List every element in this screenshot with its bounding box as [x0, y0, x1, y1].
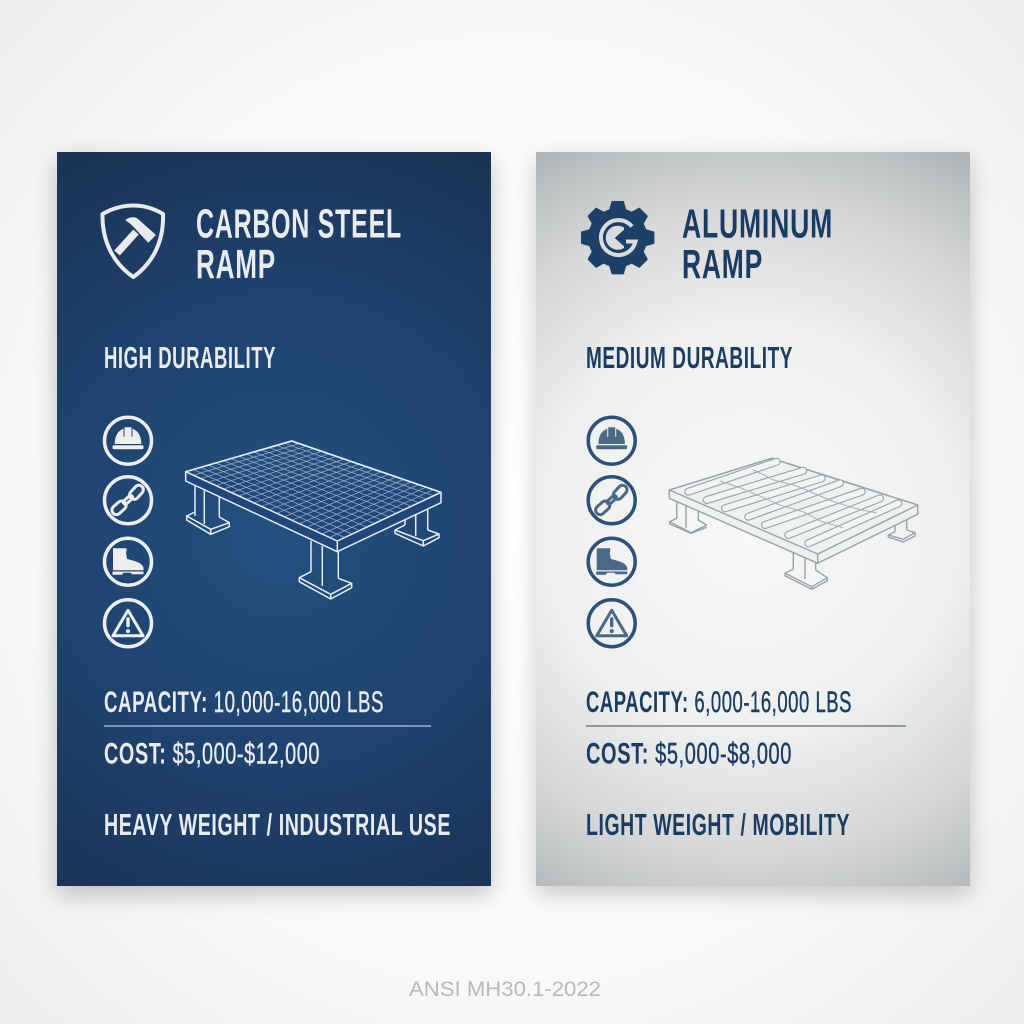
text: cost: COST: $5,000-$8,000 [586, 738, 792, 770]
illustration: aluminum plank platform [669, 458, 918, 589]
safety icon column [588, 417, 635, 647]
text: capacity: CAPACITY: 10,000-16,000 LBS [104, 686, 384, 719]
icon: boot [104, 538, 152, 585]
icon: shield with hammer [102, 206, 163, 277]
icon: hard hat [588, 417, 635, 464]
text: weight and mobility: LIGHT WEIGHT / MOBILITY [586, 807, 850, 842]
icon: boot [588, 538, 635, 585]
icon: chain [104, 477, 152, 524]
safety icon column [104, 417, 152, 647]
text: high durability: HIGH DURABILITY [104, 340, 276, 375]
heading: aluminum ramp [682, 200, 833, 287]
footer: standard reference: ANSI MH30.1-2022 [409, 978, 601, 1001]
panel: carbon steel ramp [57, 152, 491, 894]
text: capacity: CAPACITY: 6,000-16,000 LBS [586, 686, 852, 719]
icon: hard hat [104, 417, 152, 464]
icon: chain [588, 477, 635, 524]
icon: gear with arrow [581, 201, 654, 274]
heading: aluminum ramp: ALUMINUM [682, 200, 833, 246]
heading: aluminum ramp: RAMP [682, 241, 763, 287]
heading: carbon steel ramp: RAMP [196, 241, 276, 287]
panel: aluminum ramp [536, 152, 970, 894]
text: cost: COST: $5,000-$12,000 [104, 738, 320, 770]
illustration: steel grating platform [186, 441, 441, 599]
icon: warning triangle [104, 600, 152, 647]
heading: carbon steel ramp: CARBON STEEL [196, 200, 402, 246]
icon: warning triangle [588, 600, 635, 647]
text: weight and use: HEAVY WEIGHT / INDUSTRIAL USE [104, 807, 451, 842]
text: medium durability: MEDIUM DURABILITY [586, 340, 793, 375]
heading: carbon steel ramp [196, 200, 402, 287]
